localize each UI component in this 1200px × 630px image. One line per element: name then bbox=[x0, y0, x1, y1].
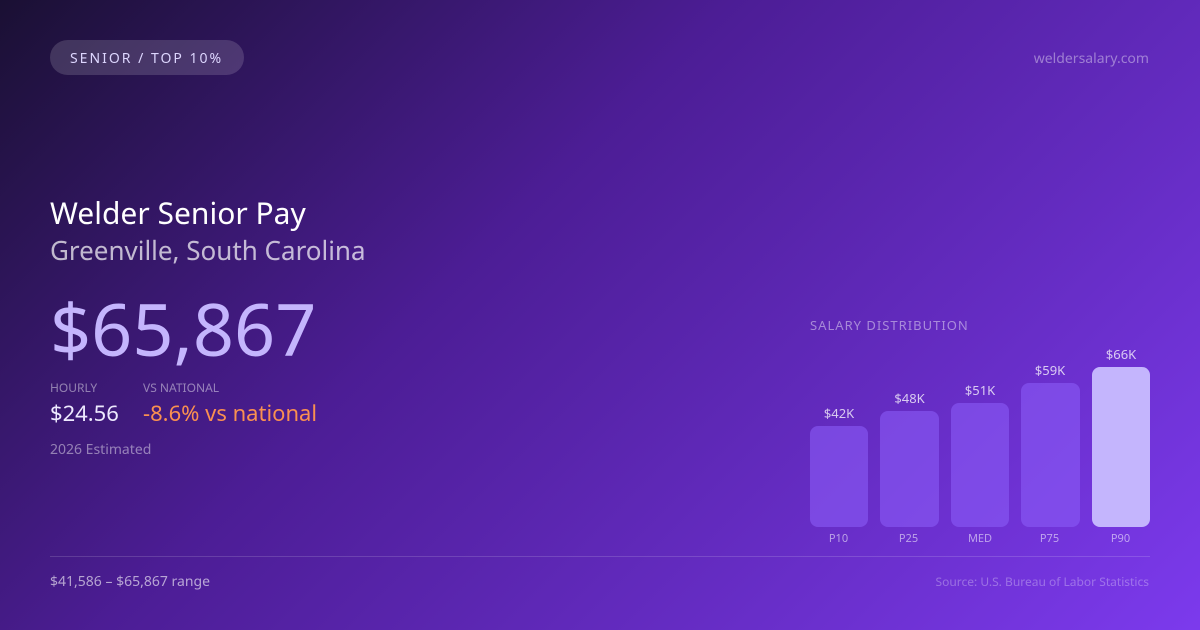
bar: P75: $59K bbox=[1035, 361, 1065, 379]
chart heading: SALARY DISTRIBUTION bbox=[810, 316, 969, 334]
site name: weldersalary.com bbox=[1034, 49, 1149, 68]
stat: vs national: -8.6% vs national bbox=[143, 398, 317, 428]
bar: P90 bbox=[1092, 345, 1150, 546]
bar: P25 bbox=[880, 389, 939, 546]
stat: hourly bbox=[50, 379, 119, 428]
bar: P10 bbox=[810, 404, 868, 546]
bar: P75 bbox=[1021, 361, 1080, 546]
main salary figure: $65,867 bbox=[50, 280, 316, 378]
bar: P90: P90 bbox=[1111, 531, 1130, 546]
bar: P10: $42K bbox=[824, 404, 854, 422]
bar: P25: P25 bbox=[899, 531, 918, 546]
stat: hourly: $24.56 bbox=[50, 398, 119, 428]
stat: vs national: VS NATIONAL bbox=[143, 379, 219, 396]
bar: median bbox=[951, 381, 1009, 546]
bar: P90: $66K bbox=[1106, 345, 1136, 363]
stat: hourly: HOURLY bbox=[50, 379, 97, 396]
title: Welder Senior Pay bbox=[50, 192, 306, 233]
bar: median: $51K bbox=[965, 381, 995, 399]
source note: Source: U.S. Bureau of Labor Statistics bbox=[936, 573, 1149, 590]
bar: P75: P75 bbox=[1040, 531, 1059, 546]
location subtitle: Greenville, South Carolina bbox=[50, 232, 366, 268]
bar: median: MED bbox=[968, 531, 992, 546]
badge: senior / top 10% bbox=[50, 40, 244, 75]
salary range: $41,586 – $65,867 range bbox=[50, 572, 210, 591]
badge: senior / top 10%: SENIOR / TOP 10% bbox=[70, 49, 223, 68]
bar: P10: P10 bbox=[829, 531, 848, 546]
stat: vs national bbox=[143, 379, 317, 428]
year note: 2026 Estimated bbox=[50, 440, 151, 459]
bar chart: salary distribution bbox=[810, 345, 1150, 546]
bar: P25: $48K bbox=[894, 389, 925, 407]
